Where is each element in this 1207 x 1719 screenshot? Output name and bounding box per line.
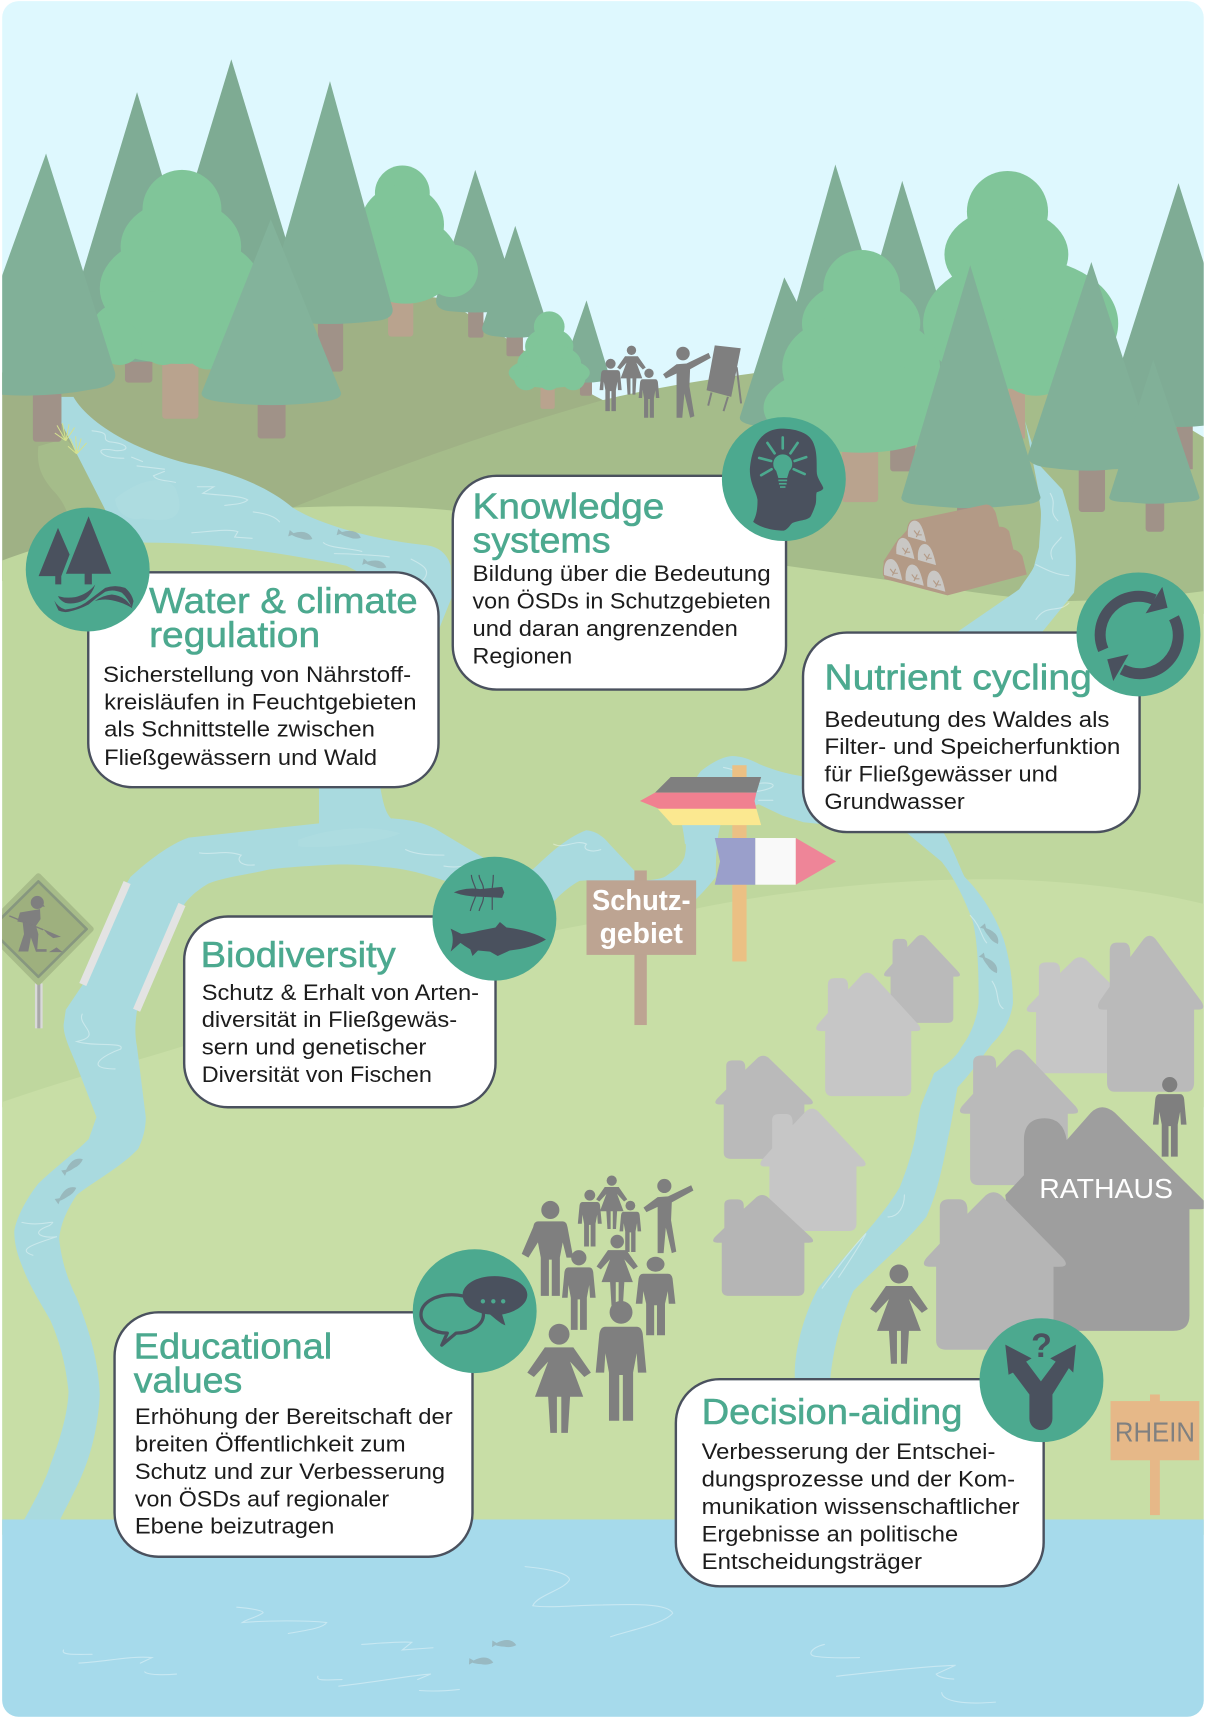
text block: decision body: Ergebnisse an politische xyxy=(702,1521,958,1546)
icon: forked arrows with question mark: ? xyxy=(1031,1327,1052,1365)
heading: Water & climate regulation: Water & climate xyxy=(149,580,418,621)
construction road sign xyxy=(0,876,91,1028)
front house xyxy=(924,1192,1066,1350)
heading: Biodiversity: Biodiversity xyxy=(201,934,396,975)
Schutzgebiet sign xyxy=(587,870,696,1025)
heading: Nutrient cycling: Nutrient cycling xyxy=(824,657,1092,698)
text block: water body: Sicherstellung von Nährstoff- xyxy=(103,662,411,687)
heading: Water & climate regulation: regulation xyxy=(149,614,320,655)
reed grass at stream source xyxy=(55,423,87,454)
ripple lines on the Rhine xyxy=(63,1567,995,1703)
icon: head with lightbulb xyxy=(722,417,846,541)
panel: Nutrient cycling xyxy=(803,633,1140,832)
text block: decision body: dungsprozesse und der Kom- xyxy=(702,1467,1015,1492)
ripple lines on rivers xyxy=(22,431,1069,1288)
person by town hall xyxy=(1153,1077,1187,1157)
arrow: Germany xyxy=(640,777,761,825)
icon: cycle arrows xyxy=(1077,572,1200,696)
woman by the river xyxy=(870,1265,928,1364)
text block: decision body: Verbesserung der Entschei- xyxy=(702,1439,995,1464)
heading: Knowledge systems: systems xyxy=(472,520,611,561)
hills xyxy=(0,297,1206,1535)
water surface highlights xyxy=(115,480,180,520)
heading: Knowledge systems: Knowledge xyxy=(472,486,664,527)
text block: knowledge body xyxy=(472,561,771,668)
text block: knowledge body: Regionen xyxy=(472,643,572,668)
text block: decision body xyxy=(702,1439,1020,1574)
text block: biodiversity body: diversität in Fließgewäs- xyxy=(202,1007,457,1032)
text block: educational body xyxy=(135,1404,453,1539)
text block: biodiversity body xyxy=(202,980,479,1087)
text block: nutrient body: Filter- und Speicherfunktion xyxy=(824,734,1120,759)
text block: educational body: breiten Öffentlichkeit zum xyxy=(135,1432,406,1457)
text block: water body xyxy=(103,662,417,770)
heading: Educational values xyxy=(134,1325,332,1400)
text block: biodiversity body: Diversität von Fischen xyxy=(202,1062,432,1087)
text block: educational body: Erhöhung der Bereitschaft der xyxy=(135,1404,453,1429)
Schutzgebiet sign: gebiet xyxy=(600,918,683,950)
text block: knowledge body: Bildung über die Bedeutung xyxy=(472,561,771,586)
village houses xyxy=(713,935,1203,1296)
heading: Educational values: values xyxy=(134,1359,242,1400)
town hall: RATHAUS xyxy=(1039,1173,1173,1204)
text block: nutrient body: Grundwasser xyxy=(824,789,965,814)
Schutzgebiet sign: Schutz- xyxy=(592,885,691,917)
forest: left xyxy=(0,59,609,442)
panel: Biodiversity xyxy=(184,917,496,1107)
text block: educational body: Ebene beizutragen xyxy=(135,1514,334,1539)
text block: nutrient body: Bedeutung des Waldes als xyxy=(824,707,1109,732)
fish in the Rhine xyxy=(469,1639,517,1666)
crowd of citizens xyxy=(522,1176,693,1433)
heading: Water & climate regulation xyxy=(149,580,418,655)
text block: biodiversity body: sern und genetischer xyxy=(202,1035,427,1060)
river system xyxy=(14,397,1076,1524)
text block: nutrient body: für Fließgewässer und xyxy=(824,762,1058,787)
text block: water body: kreisläufen in Feuchtgebieten xyxy=(104,689,417,714)
people and flip chart at forest edge xyxy=(600,345,741,418)
panel: Water & climate regulation xyxy=(88,572,439,787)
heading: Decision-aiding: Decision-aiding xyxy=(702,1391,963,1432)
panel: Knowledge systems xyxy=(453,476,786,690)
signpost with national flag arrows xyxy=(640,765,836,961)
heading: Knowledge systems xyxy=(472,486,664,561)
forest: right xyxy=(740,164,1206,532)
icon: forked arrows with question mark xyxy=(980,1318,1103,1442)
icon: speech bubbles xyxy=(413,1249,537,1373)
icon: trees and waves xyxy=(26,508,150,631)
text block: knowledge body: von ÖSDs in Schutzgebieten xyxy=(472,588,771,613)
text block: educational body: Schutz und zur Verbesserung xyxy=(135,1459,445,1484)
levee strips along river xyxy=(83,883,182,1010)
text block: knowledge body: und daran angrenzenden xyxy=(472,616,738,641)
arrow: France xyxy=(715,838,836,885)
small fish in the rivers xyxy=(54,528,1001,1204)
log pile xyxy=(883,505,1027,595)
town hall xyxy=(1005,1107,1206,1331)
icon: insect and fish xyxy=(432,857,556,981)
text block: water body: als Schnittstelle zwischen xyxy=(104,717,375,742)
text block: water body: Fließgewässern und Wald xyxy=(104,745,377,770)
Rhine water xyxy=(0,1519,1206,1718)
panel: Educational values xyxy=(115,1312,472,1557)
text block: decision body: Entscheidungsträger xyxy=(702,1549,923,1574)
text block: educational body: von ÖSDs auf regionaler xyxy=(135,1486,390,1511)
text block: biodiversity body: Schutz & Erhalt von Arten- xyxy=(202,980,479,1005)
heading: Educational values: Educational xyxy=(134,1325,332,1366)
text block: nutrient body xyxy=(824,707,1120,814)
panel: Decision-aiding xyxy=(676,1379,1044,1586)
text block: decision body: munikation wissenschaftlicher xyxy=(702,1494,1020,1519)
RHEIN sign: RHEIN xyxy=(1115,1417,1195,1448)
RHEIN sign xyxy=(1111,1394,1199,1515)
